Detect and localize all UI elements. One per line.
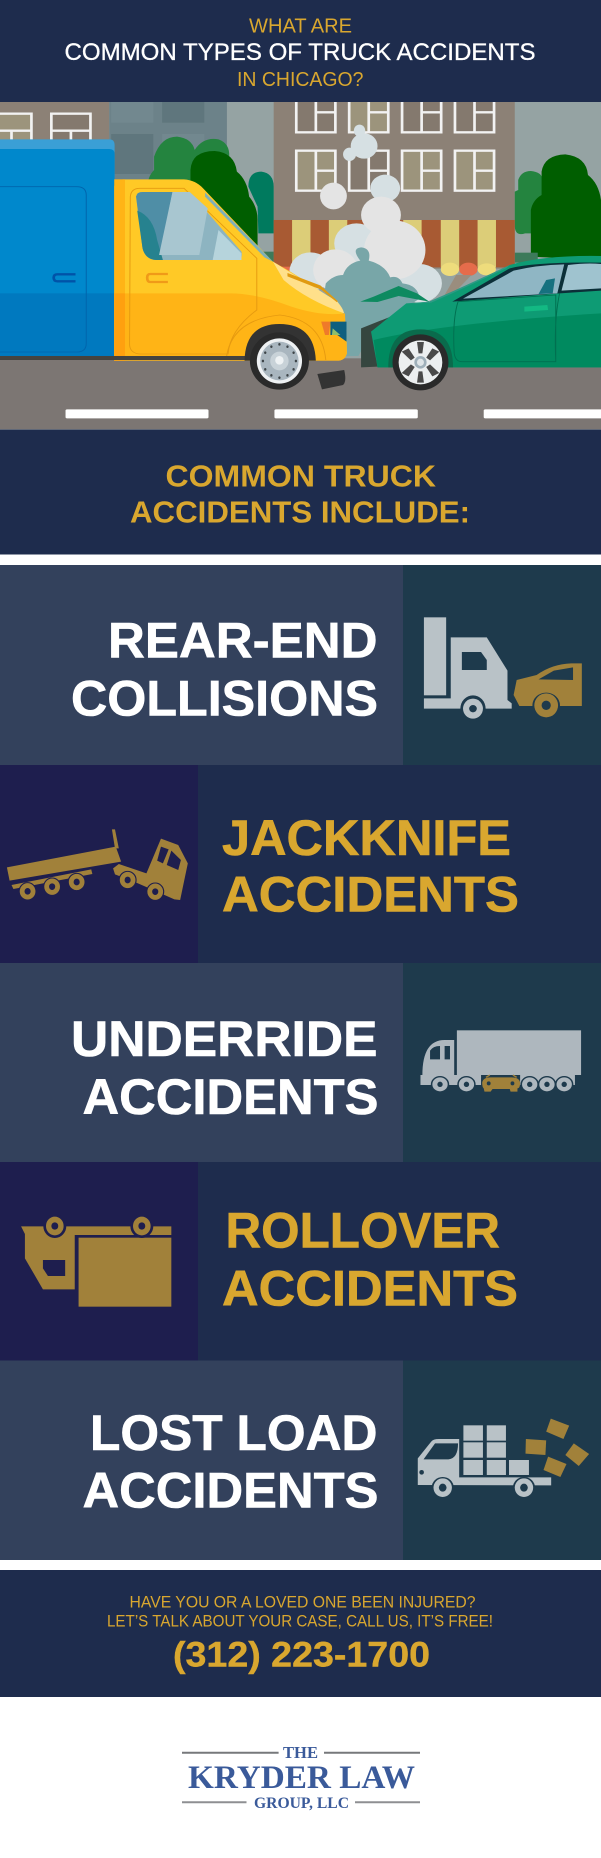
- icon: truck losing boxes: [418, 1419, 589, 1498]
- bumper debris: [317, 370, 345, 389]
- icon: car under truck trailer: [420, 1030, 581, 1092]
- label: lost load accidents: [82, 1405, 378, 1519]
- heading line 1: COMMON TRUCK: [166, 458, 437, 494]
- label: rollover accidents: ROLLOVER: [226, 1203, 500, 1259]
- label: rear-end collisions: COLLISIONS: [71, 670, 378, 726]
- panel: rollover accidents: [0, 1162, 601, 1360]
- center building: [274, 97, 515, 269]
- panel: rear-end collisions: [0, 565, 601, 765]
- panel: call to action: [0, 1570, 601, 1697]
- label: lost load accidents: LOST LOAD: [90, 1405, 378, 1461]
- title line: what are: WHAT ARE: [249, 15, 352, 37]
- panel: common truck accidents include: [0, 430, 601, 554]
- label: lost load accidents: ACCIDENTS: [82, 1463, 378, 1519]
- label: rollover accidents: ACCIDENTS: [222, 1260, 518, 1316]
- icon: overturned truck: [21, 1214, 171, 1307]
- panel: underride accidents: [0, 963, 601, 1162]
- heading line 2: ACCIDENTS INCLUDE:: [130, 494, 470, 530]
- icon: truck hitting rear of car: [424, 617, 582, 722]
- panel: lost load accidents: [0, 1360, 601, 1560]
- call to action text line 1: HAVE YOU OR A LOVED ONE BEEN INJURED?: [130, 1594, 476, 1612]
- logo: the kryder law group: THE: [283, 1743, 318, 1762]
- road: [0, 358, 601, 429]
- label: rear-end collisions: REAR-END: [108, 613, 378, 669]
- panel: jackknife accidents: [0, 765, 601, 963]
- label: jackknife accidents: ACCIDENTS: [222, 866, 519, 922]
- label: rear-end collisions: [71, 613, 378, 726]
- logo: the kryder law group: [182, 1743, 420, 1812]
- logo: the kryder law group: KRYDER LAW: [188, 1760, 415, 1796]
- icon: jackknifed truck: [7, 829, 188, 900]
- call to action text line 2: LET’S TALK ABOUT YOUR CASE, CALL US, IT’S FREE!: [107, 1612, 493, 1630]
- title line: in chicago: IN CHICAGO?: [237, 69, 364, 91]
- awning: [274, 220, 515, 295]
- green car: [360, 256, 601, 367]
- label: jackknife accidents: [222, 810, 519, 922]
- label: underride accidents: [71, 1011, 378, 1125]
- label: jackknife accidents: JACKKNIFE: [222, 810, 511, 866]
- teal smoke: [325, 247, 420, 356]
- title line: common types of truck accidents: COMMON TYPES OF TRUCK ACCIDENTS: [64, 39, 536, 66]
- smoke: [289, 125, 442, 303]
- logo: the kryder law group: GROUP, LLC: [254, 1795, 349, 1812]
- title panel: [0, 0, 601, 102]
- left buildings: [0, 102, 227, 180]
- illustration: truck and car crash: [0, 97, 601, 429]
- phone number: (312) 223-1700: [173, 1636, 430, 1675]
- yellow cab: [0, 179, 347, 361]
- blue cargo box: [0, 139, 115, 357]
- truck wheel: [245, 324, 316, 390]
- label: underride accidents: ACCIDENTS: [82, 1069, 378, 1125]
- car wheel: [388, 329, 453, 390]
- label: rollover accidents: [222, 1203, 518, 1316]
- label: underride accidents: UNDERRIDE: [71, 1011, 378, 1067]
- trees: [148, 137, 601, 263]
